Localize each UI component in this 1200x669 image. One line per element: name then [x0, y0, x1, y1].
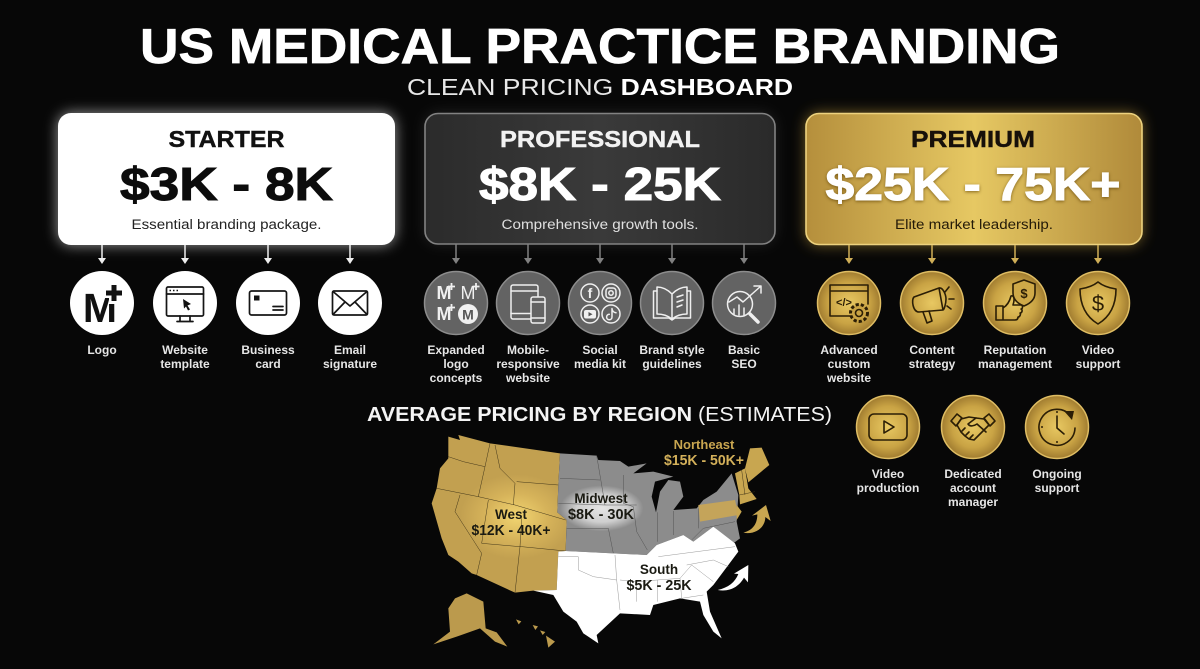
label: video production: production — [857, 481, 919, 495]
region: west — [432, 435, 567, 593]
premium price: $25K - 75K+ — [826, 158, 1120, 210]
label: advanced custom website: website — [826, 371, 871, 385]
panel: professional tier — [425, 113, 775, 244]
icon: M plus logo: M — [83, 285, 117, 331]
label: west pricing: West — [495, 507, 528, 522]
item: content strategy — [900, 272, 964, 371]
map: US pricing by region — [432, 435, 771, 648]
icon: clock with arrow — [1039, 409, 1075, 445]
label: ongoing support: support — [1035, 481, 1079, 495]
label: expanded logo concepts: Expanded — [427, 343, 485, 357]
arrow: south — [718, 565, 748, 591]
label: northeast pricing: $15K - 50K+ — [664, 453, 744, 469]
item: mobile responsive website — [496, 272, 560, 385]
label: content strategy: strategy — [909, 357, 956, 371]
starter heading: STARTER — [168, 126, 285, 152]
label: south pricing: South — [640, 562, 678, 577]
label: dedicated account manager: manager — [948, 495, 998, 509]
icon: social icons: f — [588, 285, 593, 301]
premium heading: PREMIUM — [911, 126, 1035, 152]
label: basic SEO: Basic — [728, 343, 760, 357]
icon: four logos: M — [436, 304, 452, 324]
label: midwest pricing: $8K - 30K — [568, 507, 635, 523]
item: business card — [236, 271, 300, 371]
label: midwest pricing — [568, 491, 635, 523]
label: mobile responsive website: website — [505, 371, 550, 385]
premium description: Elite market leadership. — [895, 217, 1053, 232]
icon: four logos — [436, 283, 480, 324]
subtitle: CLEAN PRICING DASHBOARD — [407, 74, 793, 100]
label: social media kit: media kit — [574, 357, 626, 371]
label: video support: Video — [1082, 343, 1114, 357]
label: mobile responsive website: responsive — [496, 357, 560, 371]
label: brand style guidelines: guidelines — [642, 357, 702, 371]
label: midwest pricing: Midwest — [574, 491, 628, 506]
icon: shield with dollar: $ — [1092, 291, 1104, 316]
item: ongoing support — [1026, 396, 1088, 495]
icon: code window and gear: </> — [836, 297, 852, 309]
label: website template: template — [160, 357, 210, 371]
region: northeast states — [698, 448, 769, 522]
icon: magnifier with growth chart — [728, 286, 761, 322]
label: expanded logo concepts: concepts — [430, 371, 483, 385]
label: content strategy: Content — [909, 343, 955, 357]
title: US MEDICAL PRACTICE BRANDING — [140, 20, 1060, 74]
region: midwest and mid-atlantic gray — [557, 453, 740, 555]
label: northeast pricing: Northeast — [674, 437, 735, 452]
item: social media kit — [568, 272, 632, 371]
label: email signature: signature — [323, 357, 377, 371]
label: social media kit: Social — [582, 343, 618, 357]
label: video support: support — [1076, 357, 1120, 371]
icon: business card — [250, 291, 286, 315]
icon: four logos: M — [436, 283, 452, 303]
starter price: $3K - 8K — [120, 158, 333, 210]
item: dedicated account manager — [942, 396, 1004, 509]
label: email signature: Email — [334, 343, 366, 357]
label: expanded logo concepts: logo — [443, 357, 469, 371]
item: logo — [70, 271, 134, 357]
icon: browser monitor — [166, 287, 204, 322]
item: basic SEO — [712, 272, 776, 371]
panel: premium tier — [806, 113, 1142, 245]
label: reputation management: Reputation — [984, 343, 1046, 357]
item: video production — [856, 396, 920, 495]
starter description: Essential branding package. — [132, 217, 322, 232]
label: basic SEO: SEO — [731, 357, 757, 371]
label: business card: Business — [241, 343, 295, 357]
icon: thumbs up and shield: $ — [1020, 286, 1028, 301]
label: video production: Video — [872, 467, 904, 481]
label: ongoing support: Ongoing — [1032, 467, 1082, 481]
professional description: Comprehensive growth tools. — [502, 217, 698, 232]
section heading: average pricing by region: AVERAGE PRICING BY REGION (ESTIMATES) — [367, 404, 832, 426]
icon: tablet and phone — [511, 285, 545, 323]
label: advanced custom website: Advanced — [820, 343, 878, 357]
label: advanced custom website: custom — [828, 357, 870, 371]
item: expanded logo concepts — [424, 272, 488, 385]
label: west pricing — [472, 507, 550, 539]
icon: handshake — [951, 414, 995, 440]
arrows: premium — [845, 245, 1102, 264]
professional price: $8K - 25K — [479, 158, 721, 210]
icon: envelope — [332, 291, 368, 315]
label: mobile responsive website: Mobile- — [507, 343, 549, 357]
panel: starter tier — [58, 113, 395, 245]
arrows: starter — [98, 245, 354, 264]
region: alaska and hawaii — [433, 593, 555, 648]
label: dedicated account manager: Dedicated — [944, 467, 1002, 481]
arrows: professional — [452, 244, 748, 264]
label: business card: card — [255, 357, 281, 371]
icon: video player — [869, 414, 907, 440]
item: email signature — [318, 271, 382, 371]
item: brand style guidelines — [639, 272, 705, 371]
icon: four logos: M — [460, 283, 476, 303]
label: reputation management: management — [978, 357, 1052, 371]
label: logo: Logo — [87, 343, 117, 357]
region: south — [533, 527, 738, 643]
item: reputation management — [978, 272, 1052, 371]
label: dedicated account manager: account — [950, 481, 996, 495]
icon: open book — [654, 287, 690, 320]
arrow: northeast — [743, 505, 771, 533]
item: website template — [153, 271, 217, 371]
icon: megaphone — [913, 287, 954, 323]
label: south pricing — [626, 562, 692, 594]
item: video support — [1066, 272, 1130, 371]
label: south pricing: $5K - 25K — [626, 578, 692, 594]
professional heading: PROFESSIONAL — [500, 126, 700, 152]
label: northeast pricing — [664, 437, 744, 469]
item: advanced custom website — [818, 272, 880, 385]
label: website template: Website — [162, 343, 208, 357]
label: west pricing: $12K - 40K+ — [472, 523, 550, 539]
icon: four logos: M — [462, 306, 474, 322]
label: brand style guidelines: Brand style — [639, 343, 705, 357]
